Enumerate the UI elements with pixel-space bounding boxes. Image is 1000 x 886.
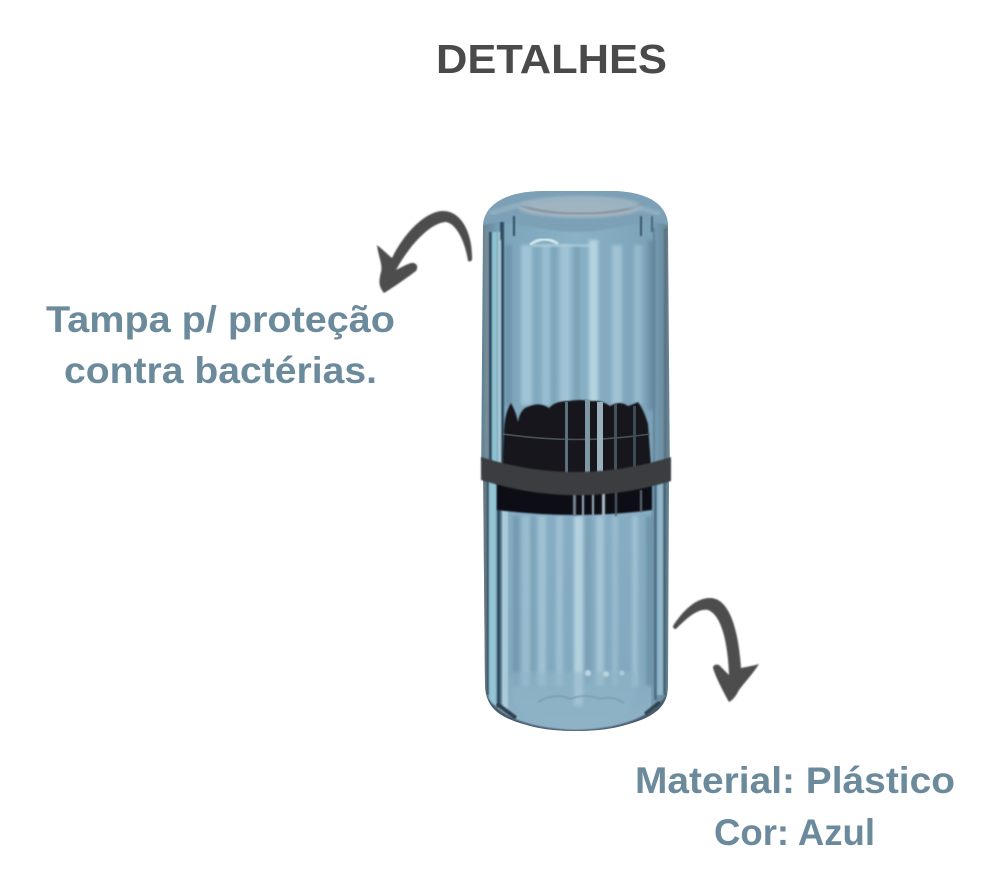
- text: material and colour: Cor: Azul: [714, 812, 875, 853]
- base: moulded bottom detail: [512, 670, 626, 706]
- base: lower transparent cup: [480, 470, 672, 735]
- inner base: dark scalloped holder: [502, 400, 652, 480]
- arrow: points to the material label: [673, 598, 759, 702]
- text: lid description: [46, 299, 395, 391]
- text: lid description: Tampa p/ proteção: [46, 299, 395, 340]
- band: dark centre ring: [481, 457, 671, 495]
- text: material and colour: Material: Plástico: [635, 760, 955, 801]
- title: DETALHES: [436, 36, 667, 82]
- lid top: dome with flat disc: [483, 191, 668, 232]
- text: lid description: contra bactérias.: [64, 350, 377, 391]
- lid: upper transparent cover: [478, 186, 674, 480]
- text: material and colour: [635, 760, 955, 853]
- base: dark holder under band: [496, 484, 653, 516]
- product: blue toothbrush travel cup: [478, 186, 674, 735]
- arrow: points to the lid label: [377, 211, 472, 293]
